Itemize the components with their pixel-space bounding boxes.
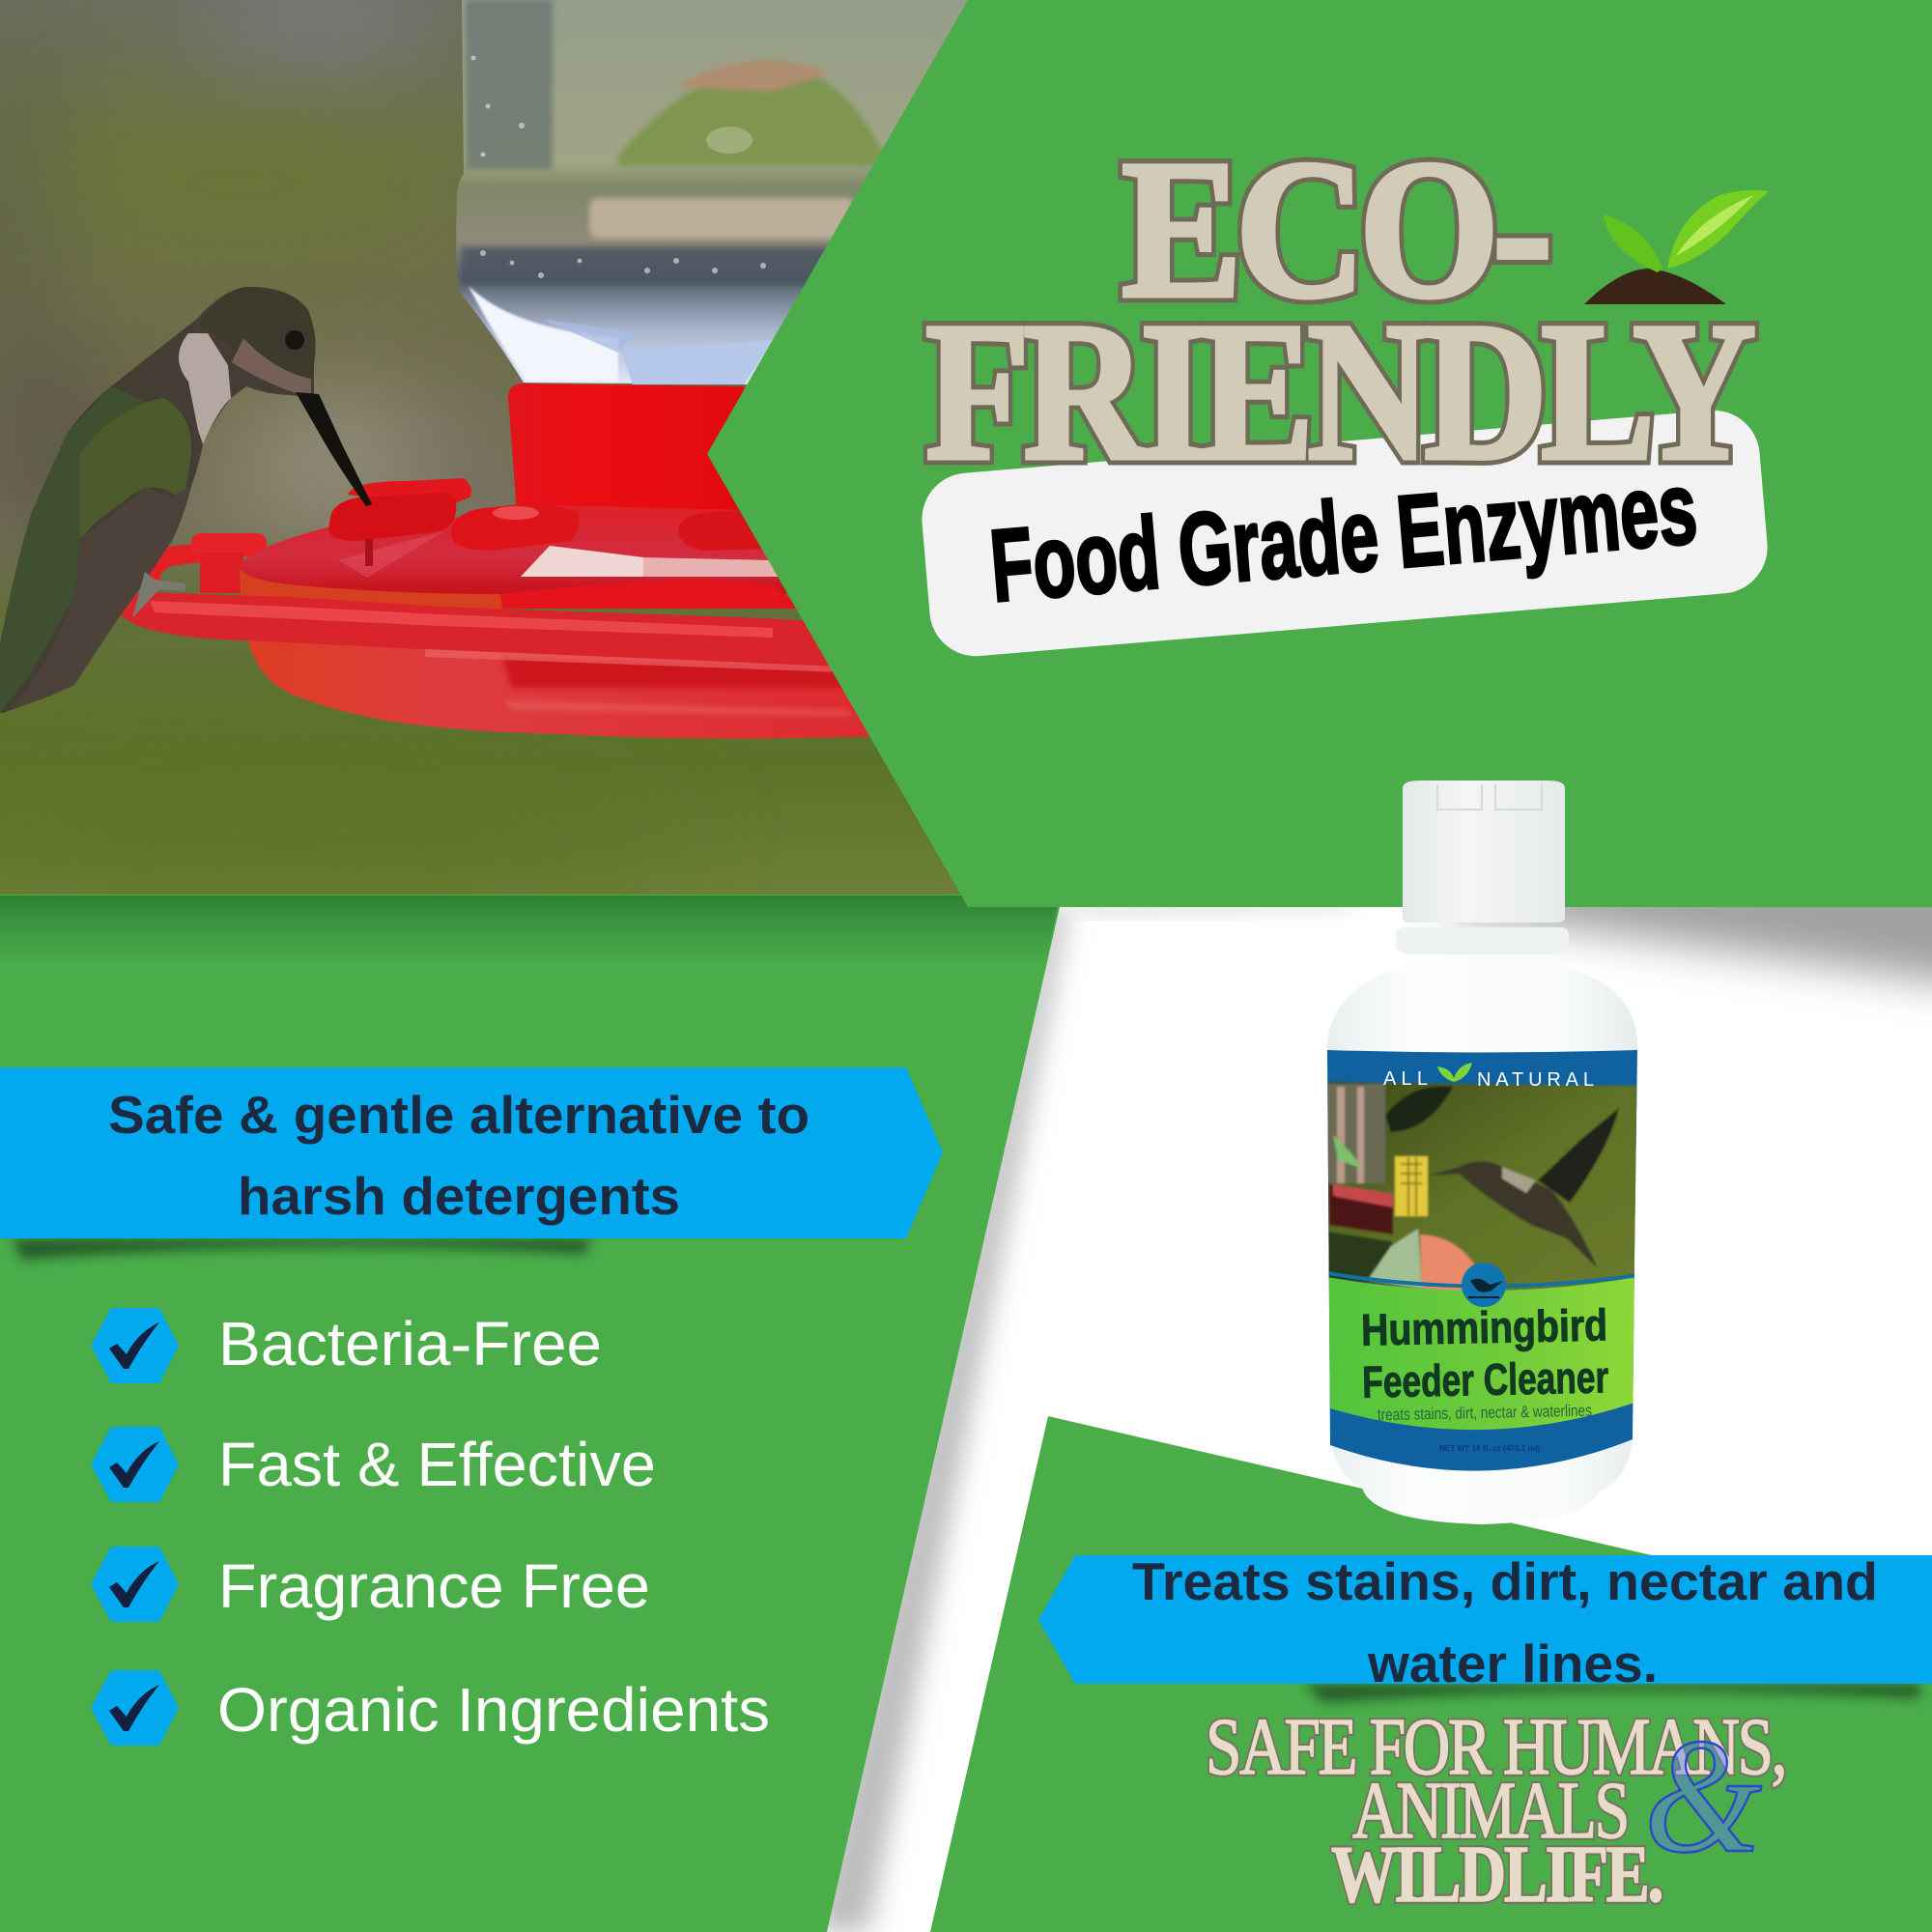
safety text fill: SAFE FOR HUMANS, [1206,1702,1785,1792]
safety text fill [1206,1702,1785,1919]
icon: label leaf [1437,1063,1472,1082]
safety text outline: WILDLIFE. [1331,1830,1662,1919]
band under lid [240,570,502,609]
feeder basin [247,638,879,739]
product name: treats stains, dirt, nectar & waterlines [1378,1402,1592,1424]
right blue banner: water lines. [1367,1634,1658,1693]
safety text fill: ANIMALS [1352,1766,1628,1856]
feeder perch rim [121,592,865,672]
net weight: NET WT 16 fl. oz (473.1 ml) [1439,1444,1540,1453]
safety text fill: WILDLIFE. [1331,1830,1662,1919]
white product area shadows [811,869,1932,1932]
left blue banner: Safe & gentle alternative to [108,1085,810,1145]
benefit: Fragrance Free: Fragrance Free [218,1551,650,1621]
glass bottle [456,0,968,386]
shadow under photo [0,895,1060,966]
callout: food grade enzymes pill [919,407,1771,660]
headline outline: ECO- [1122,120,1547,339]
headline fill [925,120,1753,501]
right blue banner [1038,1551,1932,1693]
headline fill: ECO- [1122,120,1547,339]
icon: seedling sprout [1584,190,1769,304]
label text [1383,1068,1594,1091]
safety text outline: SAFE FOR HUMANS, [1206,1702,1785,1792]
left blue banner [0,1067,943,1238]
product name: Hummingbird [1361,1299,1608,1355]
benefit: Fast & Effective: Fast & Effective [218,1430,656,1499]
left blue banner: harsh detergents [238,1166,680,1226]
blurred garden background [0,0,543,881]
ampersand script: & [1644,1705,1762,1887]
hummingbird [0,287,372,713]
product name: Feeder Cleaner [1362,1351,1609,1407]
label text: ALL [1383,1068,1428,1090]
feeder ring handle [151,533,267,593]
bottle cap [1403,781,1565,923]
safe for humans, animals & wildlife text [1206,1702,1785,1919]
headline: ECO-FRIENDLY [925,120,1753,501]
benefit: Bacteria-Free [91,1308,602,1383]
headline outline [925,120,1753,501]
safety text outline: ANIMALS [1352,1766,1628,1856]
lower right green panel [930,1416,1932,1932]
shadow: left banner [13,1238,591,1260]
label text: NATURAL [1477,1069,1594,1091]
left green panel [0,895,1060,1932]
shadow: right banner [1304,1684,1922,1702]
photo: hummingbird at red feeder [0,0,976,895]
bottle body [1327,927,1637,1524]
benefit: Organic Ingredients: Organic Ingredients [217,1675,770,1745]
right blue banner: Treats stains, dirt, nectar and [1132,1551,1878,1611]
headline outline: FRIENDLY [925,282,1753,501]
headline fill: FRIENDLY [925,282,1753,501]
product bottle [1323,781,1642,1524]
safety text outline [1206,1702,1785,1919]
benefit: Bacteria-Free: Bacteria-Free [218,1309,602,1378]
feeder lid and ports [240,478,802,609]
top right green panel [707,0,1932,907]
bottle label [1323,1048,1642,1473]
red feeder collar [508,384,763,512]
product name [1361,1299,1609,1425]
